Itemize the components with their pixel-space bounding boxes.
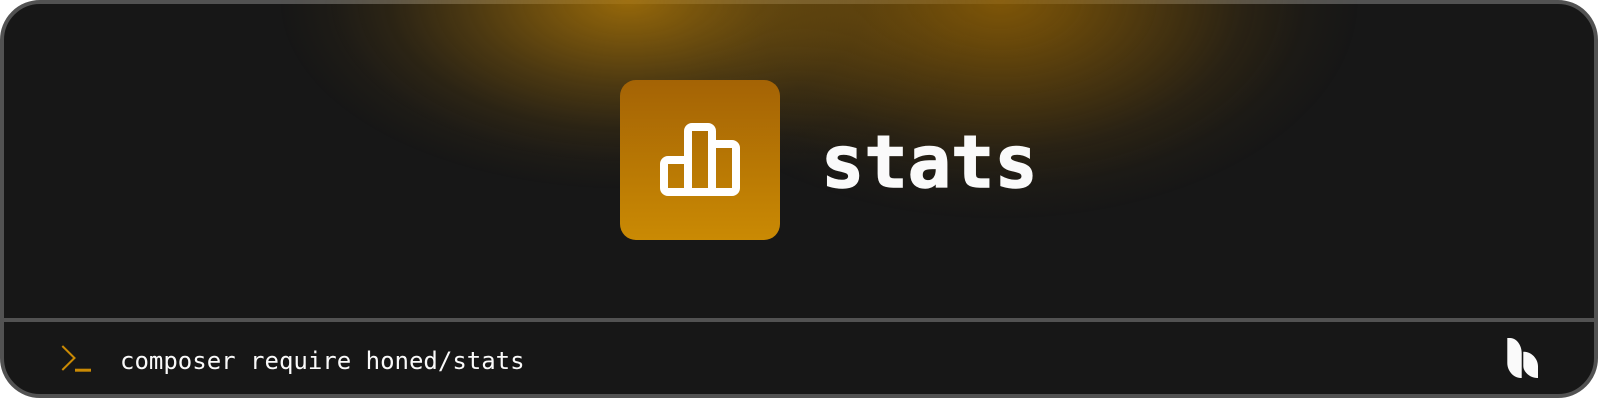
- icon: honed logo: [1507, 338, 1538, 378]
- install command: composer require honed/stats: [120, 347, 525, 375]
- icon: bar chart: [660, 123, 740, 196]
- icon tile with bar chart: [620, 80, 780, 240]
- title: stats: [821, 120, 1038, 204]
- icon: terminal prompt: [62, 345, 91, 372]
- footer divider: [4, 318, 1594, 322]
